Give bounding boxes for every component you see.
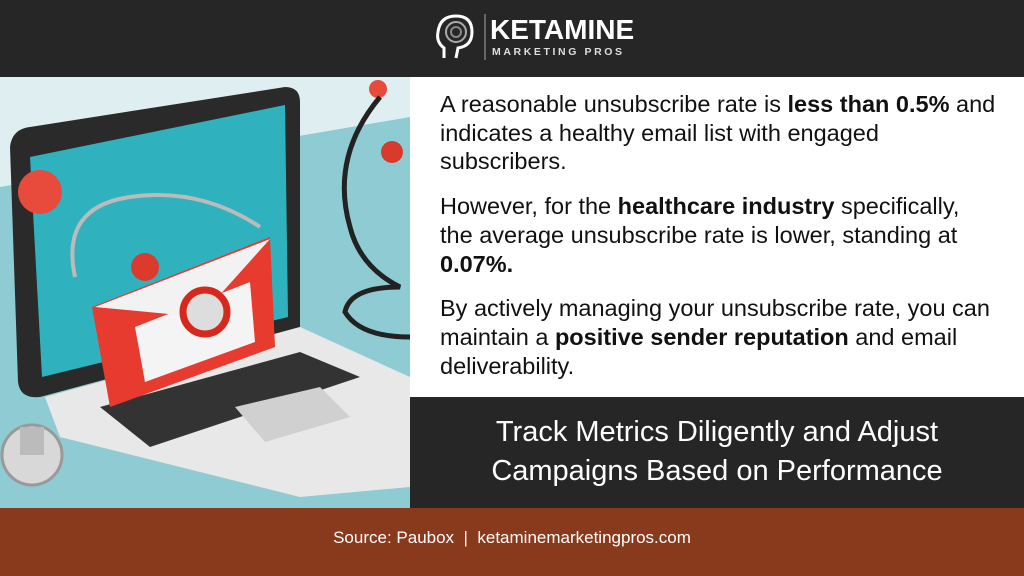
paragraph 3: deliverability.: [440, 353, 574, 379]
screen: [10, 87, 300, 397]
footer: source: [0, 508, 1024, 576]
envelope: [92, 237, 275, 407]
paragraph 3: [440, 295, 990, 379]
paragraph 3: By actively managing your unsubscribe rate, you can: [440, 295, 990, 321]
paragraph 3: maintain a positive sender reputation and email: [440, 324, 957, 350]
illustration: laptop with email and stethoscope: [0, 77, 410, 508]
callout: track metrics: Campaigns Based on Performance: [491, 455, 943, 487]
paragraph 2: However, for the healthcare industry specifically,: [440, 193, 959, 219]
paragraph 2: [440, 193, 959, 277]
logo: [436, 14, 634, 60]
logo: MARKETING PROS: [492, 46, 625, 58]
text block: [440, 91, 995, 379]
base: [45, 327, 410, 497]
paragraph 2: the average unsubscribe rate is lower, standing at: [440, 222, 957, 248]
paragraph 1: subscribers.: [440, 148, 567, 174]
footer: source: Source: Paubox | ketaminemarketingpros.com: [333, 528, 691, 547]
header bar: [0, 0, 1024, 77]
paragraph 1: [440, 91, 995, 174]
stethoscope: [72, 195, 260, 277]
callout: track metrics: [410, 397, 1024, 508]
paragraph 1: indicates a healthy email list with engaged: [440, 120, 879, 146]
paragraph 1: A reasonable unsubscribe rate is less than 0.5% and: [440, 91, 995, 117]
logo text: KETAMINE: [490, 14, 634, 45]
paragraph 2: 0.07%.: [440, 251, 513, 277]
callout: track metrics: Track Metrics Diligently and Adjust: [496, 416, 938, 448]
icon: head spiral: [436, 14, 474, 58]
